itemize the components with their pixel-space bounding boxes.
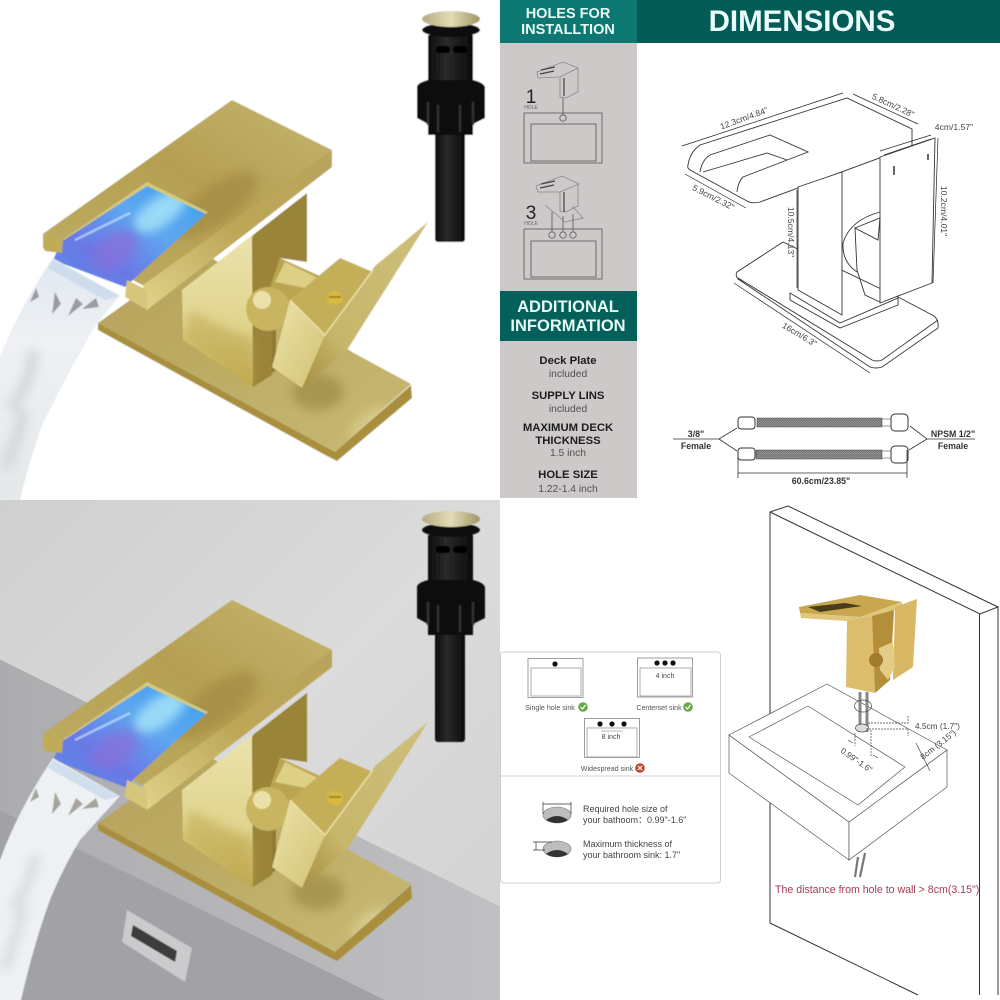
hose labels: Female <box>938 441 968 451</box>
icon: one hole diagram <box>524 62 602 163</box>
wall background <box>0 500 500 906</box>
panel: faucet photo on white <box>0 0 500 500</box>
single hole sink: Single hole sink <box>525 704 575 712</box>
text: specifications: MAXIMUM DECK <box>523 422 614 434</box>
single hole sink <box>525 658 588 712</box>
panel: sink compatibility card <box>500 652 720 883</box>
centerset sink <box>636 658 693 712</box>
panel: faucet photo in bathroom <box>0 500 505 1000</box>
dimension labels <box>839 721 960 775</box>
heading: additional information <box>500 291 637 341</box>
icon: three hole diagram <box>524 176 602 279</box>
dimension labels: 10.2cm/4.01" <box>939 186 949 236</box>
spout body outline <box>688 98 912 203</box>
dimension labels: 10.5cm/4.13" <box>786 207 796 257</box>
heading: holes for installation: HOLES FOR <box>526 6 611 22</box>
gold faucet <box>799 595 917 693</box>
hole markers and dashed guides <box>848 700 930 771</box>
water stream <box>0 758 120 1000</box>
dimension lines <box>682 93 938 373</box>
text: maximum thickness: your bathroom sink: 1.7" <box>583 850 680 860</box>
icon: one hole diagram: 1 <box>526 87 536 108</box>
icon: three hole diagram: 3 <box>526 203 536 224</box>
warning text: The distance from hole to wall > 8cm(3.15") <box>775 884 979 896</box>
heading: dimensions <box>637 0 1000 43</box>
handle cylinder and lever <box>843 212 880 302</box>
hose labels <box>681 429 975 486</box>
sink counter <box>0 657 505 1000</box>
callout lines <box>673 426 975 478</box>
dimension labels: 4cm/1.57" <box>935 122 973 132</box>
text: specifications <box>523 355 614 495</box>
hose labels: 3/8" <box>688 429 704 439</box>
spout slot <box>700 135 808 192</box>
wall outline <box>770 506 998 995</box>
dimension labels: 5.9cm/2.32" <box>691 183 736 212</box>
text: specifications: included <box>549 404 587 415</box>
widespread sink: Widespread sink <box>581 765 634 773</box>
text: required hole size <box>583 804 686 825</box>
installation diagram <box>729 506 998 995</box>
sink <box>729 684 947 860</box>
heading: holes for installation <box>500 0 637 43</box>
dimension labels: 5.8cm/2.28" <box>871 91 916 119</box>
widespread sink: 8 inch <box>602 734 620 741</box>
icon: one hole diagram: HOLE <box>524 105 538 111</box>
hose labels: Female <box>681 441 711 451</box>
dimension labels: 0.99"-1.6" <box>839 745 874 775</box>
supply hoses drawing <box>673 414 975 486</box>
dimension labels <box>691 91 973 349</box>
basin <box>0 808 395 1000</box>
text: specifications: 1.22-1.4 inch <box>538 484 598 495</box>
column outline <box>790 172 898 328</box>
heading: additional information: ADDITIONAL <box>517 298 619 316</box>
dimension labels: 8cm (3.15") <box>918 727 958 762</box>
heading: holes for installation: INSTALLTION <box>521 22 615 38</box>
faucet body <box>43 600 428 961</box>
widespread sink <box>581 718 645 773</box>
hose labels: NPSM 1/2" <box>931 429 975 439</box>
icon: hole size <box>543 802 571 823</box>
text: maximum thickness: Maximum thickness of <box>583 839 673 849</box>
heading: dimensions: DIMENSIONS <box>709 5 895 38</box>
faucet dimension drawing <box>682 91 973 373</box>
drain pipes under sink <box>855 853 865 877</box>
overflow drain <box>122 910 192 982</box>
text: required hole size: your bathoom：0.99"-1.6" <box>583 815 686 825</box>
water stream <box>0 258 120 500</box>
text: specifications: included <box>549 369 587 380</box>
hose 2 <box>738 446 908 463</box>
icon: sink thickness <box>533 841 571 857</box>
water supply pipes <box>860 692 867 732</box>
text: specifications: THICKNESS <box>535 435 601 447</box>
handle plate <box>880 138 935 303</box>
icon: pop-up drain <box>417 511 485 742</box>
faucet body <box>43 100 428 461</box>
text: required hole size: Required hole size of <box>583 804 668 814</box>
centerset sink: 4 inch <box>656 673 674 680</box>
hose labels: 60.6cm/23.85" <box>792 476 850 486</box>
dimension labels: 12.3cm/4.84" <box>719 105 769 131</box>
hose 1 <box>738 414 908 431</box>
icon: pop-up drain <box>417 11 485 242</box>
text: specifications: SUPPLY LINS <box>532 390 605 402</box>
dimension labels: 4.5cm (1.7") <box>915 721 960 731</box>
base plate outline <box>736 242 938 368</box>
text: specifications: Deck Plate <box>539 355 597 367</box>
text: specifications: HOLE SIZE <box>538 469 598 481</box>
text: maximum thickness <box>583 839 680 860</box>
icon: three hole diagram: HOLE <box>524 221 538 227</box>
centerset sink: Centerset sink <box>636 704 682 712</box>
dimension labels: 16cm/6.3" <box>781 320 819 349</box>
heading: additional information: INFORMATION <box>510 317 626 335</box>
text: specifications: 1.5 inch <box>550 448 586 459</box>
panel: holes for installation <box>500 0 637 498</box>
